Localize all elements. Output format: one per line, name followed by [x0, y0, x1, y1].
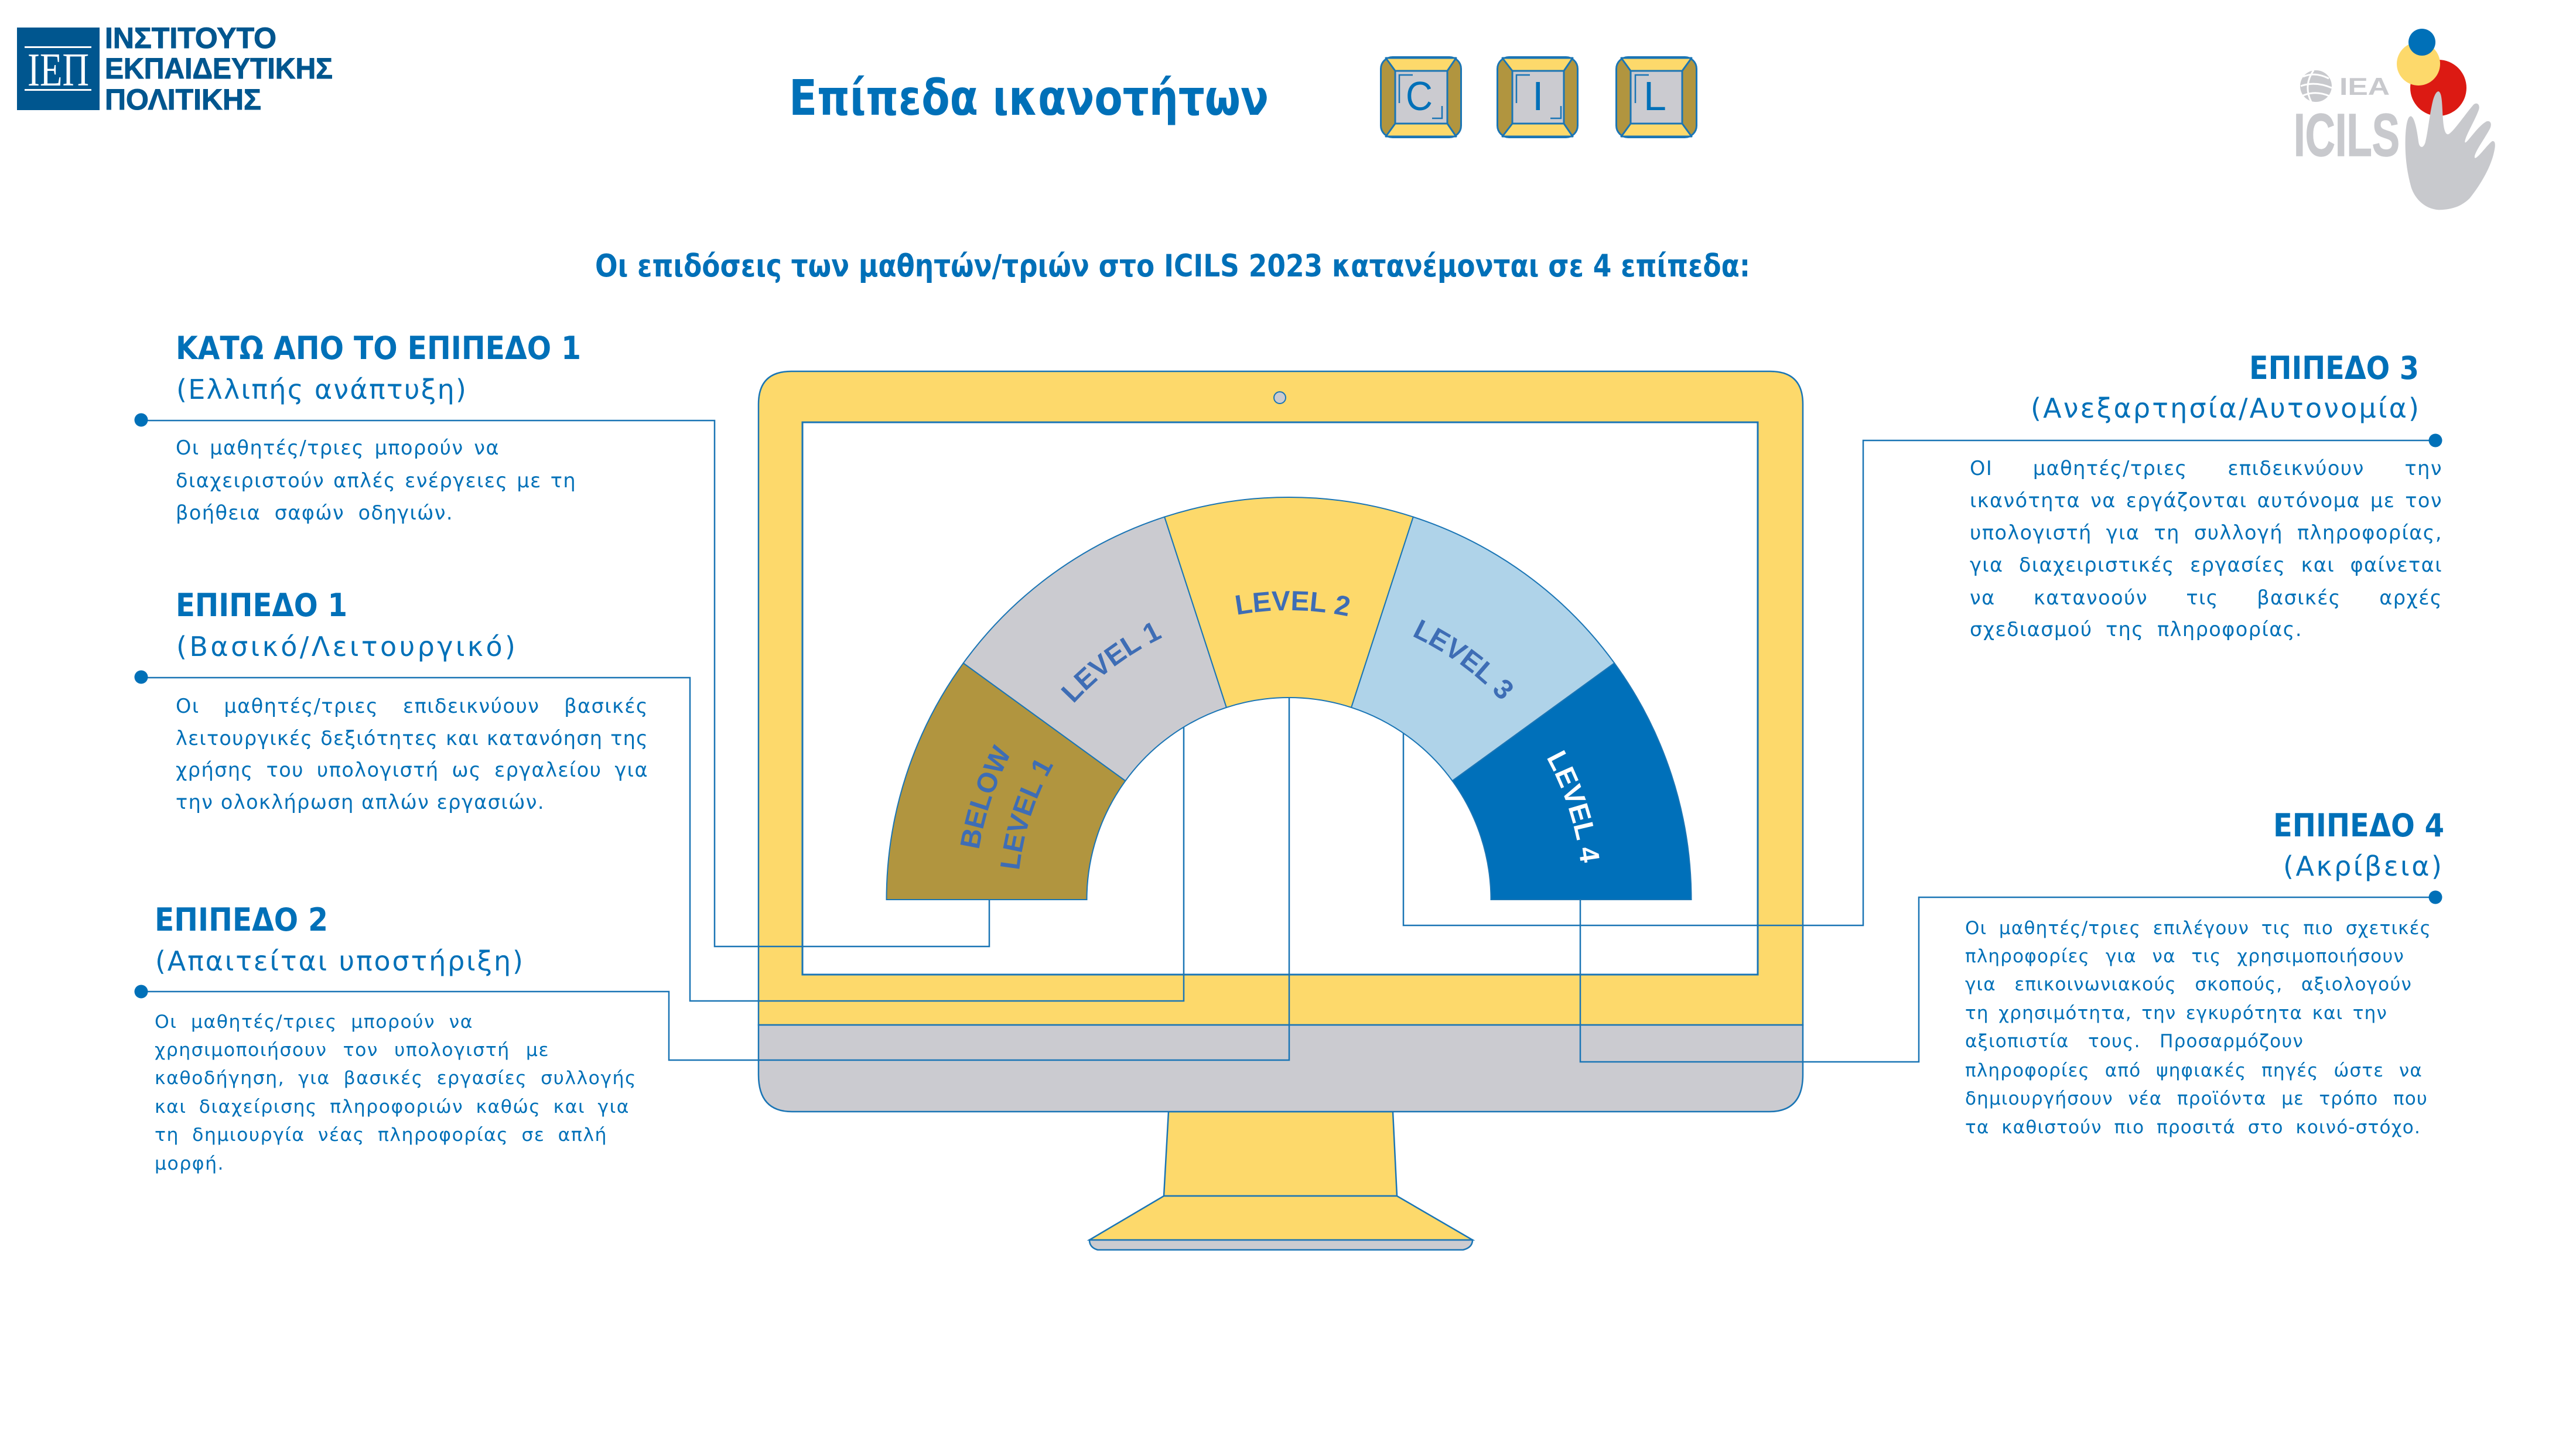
logo: IEA ICILS with hand	[2294, 29, 2495, 210]
heading: level 3	[2031, 350, 2419, 424]
logo: IEA ICILS with hand: ICILS	[2294, 101, 2400, 169]
text: level 4 description: τη χρησιμότητα, την εγκυρότητα και την	[1965, 1003, 2387, 1024]
text: below level 1 description: Οι μαθητές/τριες μπορούν να	[176, 436, 500, 459]
heading: level 2: (Απαιτείται υποστήριξη)	[155, 945, 523, 977]
connector: below level 1	[135, 413, 989, 946]
panel: level 2	[155, 901, 637, 1174]
gauge segment: level 3: LEVEL 3	[1413, 620, 1513, 699]
text: level 3 description: να κατανοούν τις βασικές αρχές	[1970, 586, 2442, 609]
text: level 4 description: Οι μαθητές/τριες επιλέγουν τις πιο σχετικές	[1965, 918, 2431, 939]
connector: level 3	[1403, 433, 2442, 925]
text: level 3 description: σχεδιασμού της πληροφορίας.	[1970, 618, 2302, 641]
text: level 2 description: Οι μαθητές/τριες μπορούν να	[155, 1011, 473, 1033]
panel: level 4	[1965, 807, 2444, 1138]
connector: level 2	[135, 698, 1289, 1060]
icon: key L	[1617, 57, 1696, 137]
text: level 2 description: χρησιμοποιήσουν τον υπολογιστή με	[155, 1040, 549, 1061]
panel: below level 1	[176, 330, 581, 524]
gauge: five-level arch	[886, 497, 1692, 900]
text: below level 1 description: βοήθεια σαφών οδηγιών.	[176, 501, 453, 524]
logo: Institute of Educational Policy	[17, 22, 333, 116]
heading: level 1: (Βασικό/Λειτουργικό)	[176, 631, 515, 662]
text: level 4 description: πληροφορίες από ψηφιακές πηγές ώστε να	[1965, 1060, 2423, 1081]
logo: Institute of Educational Policy: ΙΕΠ	[28, 45, 89, 96]
panel: level 1	[176, 587, 648, 814]
connector: level 1	[135, 670, 1184, 1001]
text: level 1 description	[176, 695, 648, 814]
gauge segment: level 2	[1164, 497, 1414, 709]
text: level 3 description	[1970, 457, 2442, 641]
logo: Institute of Educational Policy: ΠΟΛΙΤΙΚΗΣ	[105, 83, 261, 116]
gauge segment: level 3	[1351, 516, 1615, 782]
text: level 3 description: υπολογιστή για τη συλλογή πληροφορίας,	[1970, 521, 2442, 544]
icon: key L: L	[1644, 73, 1666, 119]
panel: level 3	[1970, 350, 2442, 641]
gauge segment: below level 1: BELOW	[961, 744, 1010, 848]
title: Επίπεδα ικανοτήτων	[789, 69, 1269, 127]
heading: level 3: (Ανεξαρτησία/Αυτονομία)	[2031, 392, 2419, 424]
heading: level 4	[2273, 807, 2444, 882]
text: level 2 description: καθοδήγηση, για βασικές εργασίες συλλογής	[155, 1068, 637, 1089]
text: level 1 description: λειτουργικές δεξιότητες και κατανόηση της	[176, 727, 648, 750]
text: level 4 description	[1965, 918, 2431, 1138]
text: level 4 description: για επικοινωνιακούς σκοπούς, αξιολογούν	[1965, 974, 2412, 995]
gauge segment: below level 1: LEVEL 1	[1000, 760, 1053, 869]
logo: Institute of Educational Policy: ΕΚΠΑΙΔΕΥΤΙΚΗΣ	[105, 52, 333, 85]
text: level 3 description: για διαχειριστικές εργασίες και φαίνεται	[1970, 553, 2442, 576]
text: level 1 description: την ολοκλήρωση απλών εργασιών.	[176, 791, 545, 814]
heading: level 2: ΕΠΙΠΕΔΟ 2	[155, 901, 328, 938]
gauge segment: level 2: LEVEL 2	[1235, 591, 1350, 616]
monitor	[759, 371, 1803, 1250]
icon: key I	[1497, 57, 1578, 137]
text: level 2 description	[155, 1011, 637, 1174]
text: level 4 description: τα καθιστούν πιο προσιτά στο κοινό-στόχο.	[1965, 1117, 2421, 1138]
text: level 2 description: και διαχείρισης πληροφοριών καθώς και για	[155, 1096, 630, 1117]
text: below level 1 description: διαχειριστούν απλές ενέργειες με τη	[176, 469, 576, 492]
text: level 4 description: αξιοπιστία τους. Προσαρμόζουν	[1965, 1031, 2304, 1052]
icon: key C	[1381, 57, 1461, 137]
text: level 2 description: τη δημιουργία νέας πληροφορίας σε απλή	[155, 1125, 607, 1146]
heading: level 1: ΕΠΙΠΕΔΟ 1	[176, 587, 347, 624]
heading: below level 1: ΚΑΤΩ ΑΠΟ ΤΟ ΕΠΙΠΕΔΟ 1	[176, 330, 581, 367]
text: level 4 description: δημιουργήσουν νέα προϊόντα με τρόπο που	[1965, 1088, 2428, 1109]
logo: IEA ICILS with hand: IEA	[2339, 73, 2390, 100]
logo: Institute of Educational Policy: ΙΝΣΤΙΤΟΥΤΟ	[105, 22, 276, 54]
text: level 1 description: χρήσης του υπολογιστή ως εργαλείου για	[176, 758, 648, 781]
text: level 3 description: ικανότητα να εργάζονται αυτόνομα με τον	[1970, 489, 2442, 512]
heading: level 3: ΕΠΙΠΕΔΟ 3	[2249, 350, 2419, 387]
text: level 1 description: Οι μαθητές/τριες επιδεικνύουν βασικές	[176, 695, 648, 717]
text: level 2 description: μορφή.	[155, 1153, 224, 1174]
subtitle: Οι επιδόσεις των μαθητών/τριών στο ICILS 2023 κατανέμονται σε 4 επίπεδα:	[595, 248, 1750, 284]
heading: below level 1	[176, 330, 581, 405]
heading: level 4: ΕΠΙΠΕΔΟ 4	[2273, 807, 2444, 844]
gauge segment: level 4: LEVEL 4	[1547, 750, 1599, 863]
heading: level 4: (Ακρίβεια)	[2283, 850, 2442, 882]
icon: key I: I	[1532, 73, 1543, 119]
icon: key C: C	[1406, 73, 1433, 119]
heading: level 2	[155, 901, 523, 977]
text: level 3 description: ΟΙ μαθητές/τριες επιδεικνύουν την	[1970, 457, 2442, 480]
text: below level 1 description	[176, 436, 576, 524]
text: level 4 description: πληροφορίες για να τις χρησιμοποιήσουν	[1965, 946, 2404, 967]
heading: level 1	[176, 587, 515, 662]
gauge segment: level 1	[962, 516, 1227, 782]
gauge segment: below level 1	[886, 662, 1126, 900]
heading: below level 1: (Ελλιπής ανάπτυξη)	[176, 374, 466, 405]
connector: level 4	[1580, 890, 2442, 1062]
gauge segment: level 1: LEVEL 1	[1061, 623, 1162, 703]
gauge segment: level 4	[1451, 662, 1692, 900]
